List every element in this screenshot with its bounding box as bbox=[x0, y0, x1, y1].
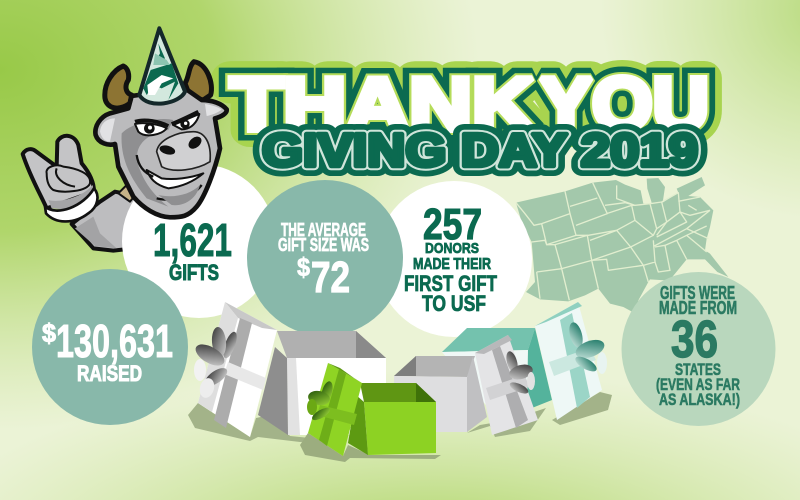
title: Thank You: YOU bbox=[540, 62, 709, 146]
stat circle: 36 states: MADE FROM bbox=[659, 298, 737, 318]
stat circle: 257 donors: TO USF bbox=[422, 291, 486, 316]
mascot face shading bbox=[122, 119, 173, 207]
mascot: bull head with party hat bbox=[95, 28, 227, 217]
mascot: hand bbox=[23, 136, 97, 221]
stat circle: 1,621 gifts: GIFTS bbox=[169, 260, 219, 285]
mascot horns bbox=[105, 62, 211, 108]
gift: open teal box with lid bbox=[442, 302, 612, 425]
stat circle: 36 states: (EVEN AS FAR bbox=[656, 375, 740, 394]
stat circle: 257 donors: MADE THEIR bbox=[413, 256, 491, 273]
stat circle: 36 states: 36 bbox=[671, 311, 718, 369]
stat circle: 1,621 gifts: 1,621 bbox=[153, 214, 232, 266]
stat circle: 36 states: STATES bbox=[675, 360, 721, 379]
title: Thank You: THANK bbox=[230, 62, 535, 146]
mascot head shape bbox=[95, 88, 227, 217]
stat circle: average gift bbox=[247, 180, 403, 336]
title: Thank You: THANK bbox=[230, 62, 535, 146]
stat circle: 36 states: GIFTS WERE bbox=[660, 283, 735, 303]
stat circle: average gift: GIFT SIZE WAS bbox=[278, 235, 369, 255]
stat circle: amount raised: RAISED bbox=[77, 361, 142, 386]
stat circle: amount raised: 130,631 bbox=[56, 315, 173, 367]
gift: open white box with lid bbox=[188, 302, 386, 442]
mascot arm bbox=[72, 192, 140, 251]
subtitle: Giving Day 2019: GIVING DAY 2019 bbox=[262, 124, 698, 176]
stat circle: average gift: THE AVERAGE bbox=[281, 220, 366, 240]
subtitle: Giving Day 2019: GIVING DAY 2019 bbox=[262, 124, 698, 176]
stat circle: 36 states: AS ALASKA!) bbox=[659, 390, 740, 409]
stat circle: amount raised: $ bbox=[42, 318, 57, 348]
title: Thank You bbox=[230, 62, 709, 146]
title: Thank You: THANK bbox=[230, 62, 535, 146]
title: Thank You: YOU bbox=[540, 62, 709, 146]
subtitle: Giving Day 2019: GIVING DAY 2019 bbox=[262, 124, 698, 176]
title: Thank You: YOU bbox=[540, 62, 709, 146]
mascot eyes bbox=[135, 112, 199, 135]
stat circle: amount raised bbox=[32, 269, 188, 425]
mascot muzzle and mouth bbox=[137, 132, 210, 205]
stat circle: 36 states bbox=[622, 272, 776, 426]
stat circle: average gift: 72 bbox=[311, 253, 350, 302]
stat circle: 257 donors: 257 bbox=[423, 200, 482, 249]
mascot ears bbox=[100, 104, 222, 142]
stat circle: 257 donors bbox=[376, 181, 532, 337]
title: Thank You: YOU bbox=[540, 62, 709, 146]
mascot party hat bbox=[139, 28, 185, 104]
map: United States bbox=[516, 177, 728, 316]
mascot collar bbox=[118, 183, 137, 202]
stat circle: 257 donors: DONORS bbox=[425, 240, 479, 257]
gift: open green box with lid bbox=[300, 363, 441, 462]
stat circle: 257 donors: FIRST GIFT bbox=[404, 271, 497, 296]
stat circle: 1,621 gifts bbox=[122, 164, 276, 318]
stat circle: average gift: $ bbox=[297, 252, 310, 282]
gift: open grey box with lid bbox=[394, 335, 546, 437]
title: Thank You: THANK bbox=[230, 62, 535, 146]
